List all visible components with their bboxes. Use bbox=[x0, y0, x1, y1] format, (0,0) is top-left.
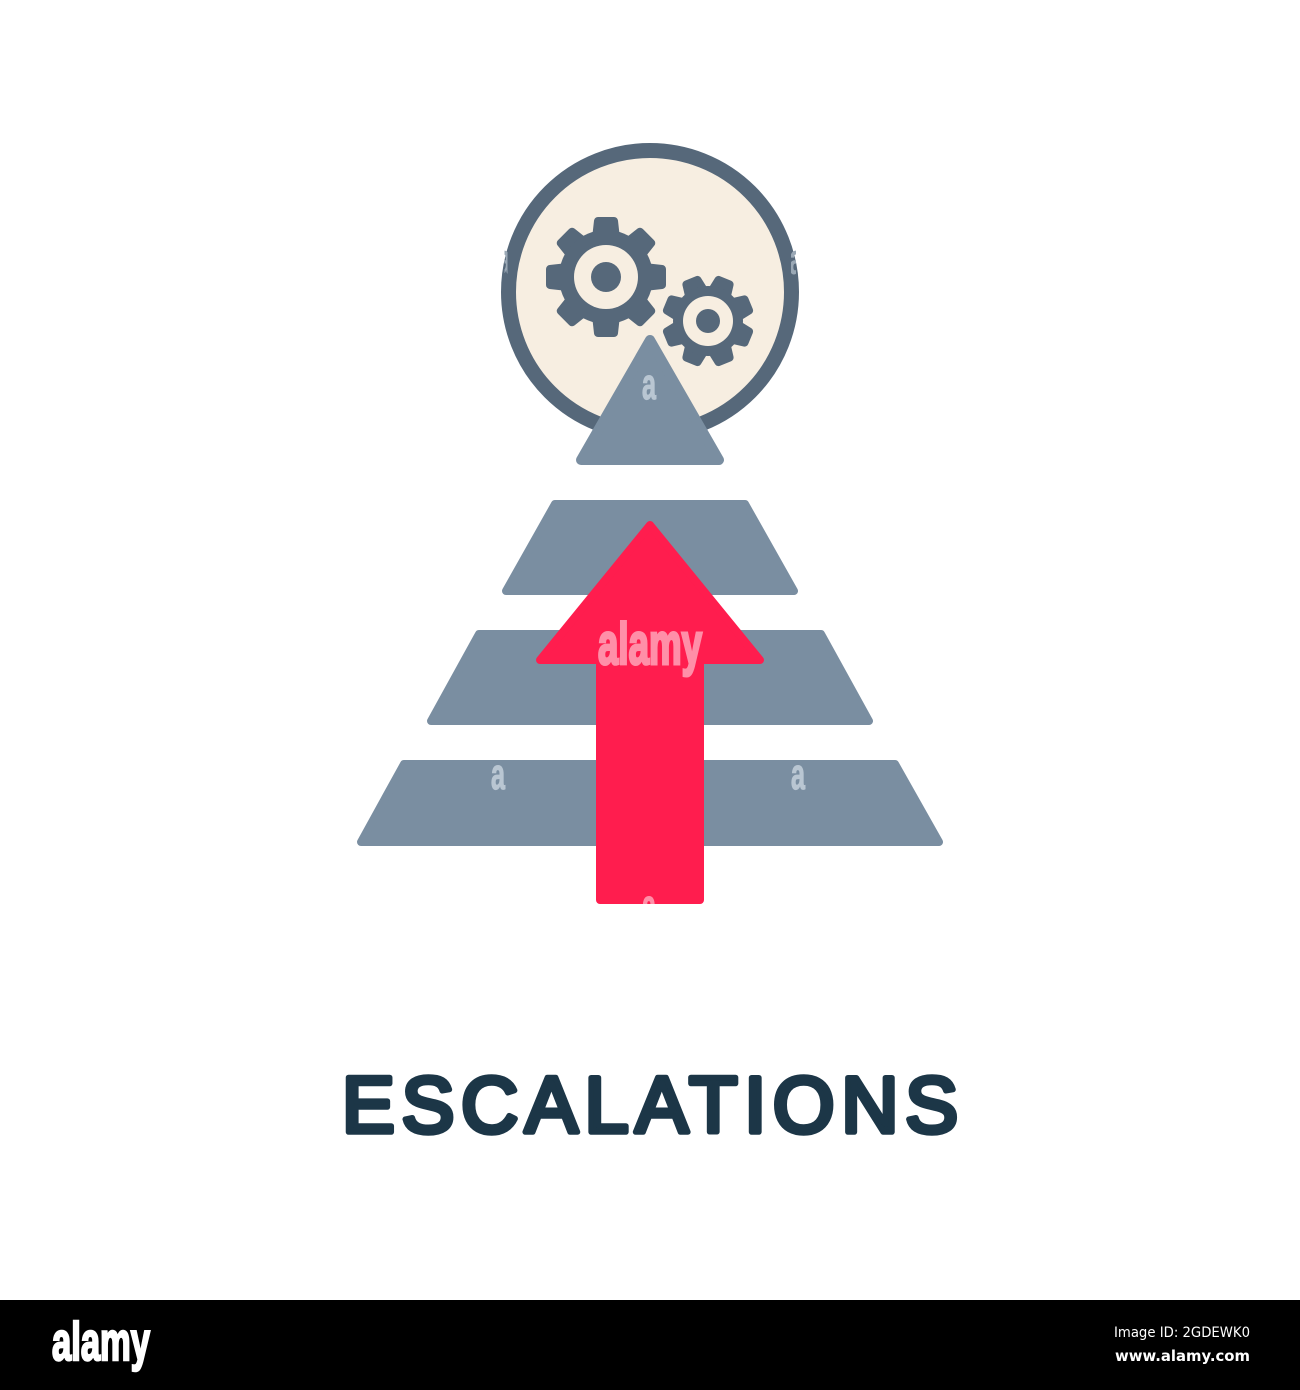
watermark: a at arrow base: a bbox=[642, 881, 656, 930]
icon: small gear bbox=[666, 279, 750, 363]
title: ESCALATIONS bbox=[342, 1060, 958, 1149]
footer logo: alamy bbox=[52, 1312, 150, 1372]
icon: large gear bbox=[550, 221, 662, 333]
circle badge bbox=[508, 150, 792, 434]
watermark: a on ring right: a bbox=[789, 235, 803, 284]
image id: Image ID: 2GDEWK0 bbox=[1114, 1325, 1250, 1341]
watermark: a on triangle: a bbox=[642, 360, 656, 409]
footer bar bbox=[0, 1300, 1300, 1390]
pyramid tier 2 bbox=[431, 634, 869, 721]
watermark: alamy on arrow: alamy bbox=[598, 612, 702, 677]
watermark: a on tier 3 left: a bbox=[491, 750, 505, 799]
pyramid top triangle bbox=[581, 340, 719, 460]
pyramid tier 1 bbox=[506, 504, 794, 591]
arrow: escalation up bbox=[540, 525, 760, 900]
watermark: a on ring left: a bbox=[497, 235, 511, 284]
pyramid tier 3 bbox=[361, 764, 939, 842]
website: www.alamy.com bbox=[1115, 1347, 1250, 1365]
watermark: a on tier 3 right: a bbox=[791, 750, 805, 799]
icon: gears in circle bbox=[508, 150, 792, 434]
